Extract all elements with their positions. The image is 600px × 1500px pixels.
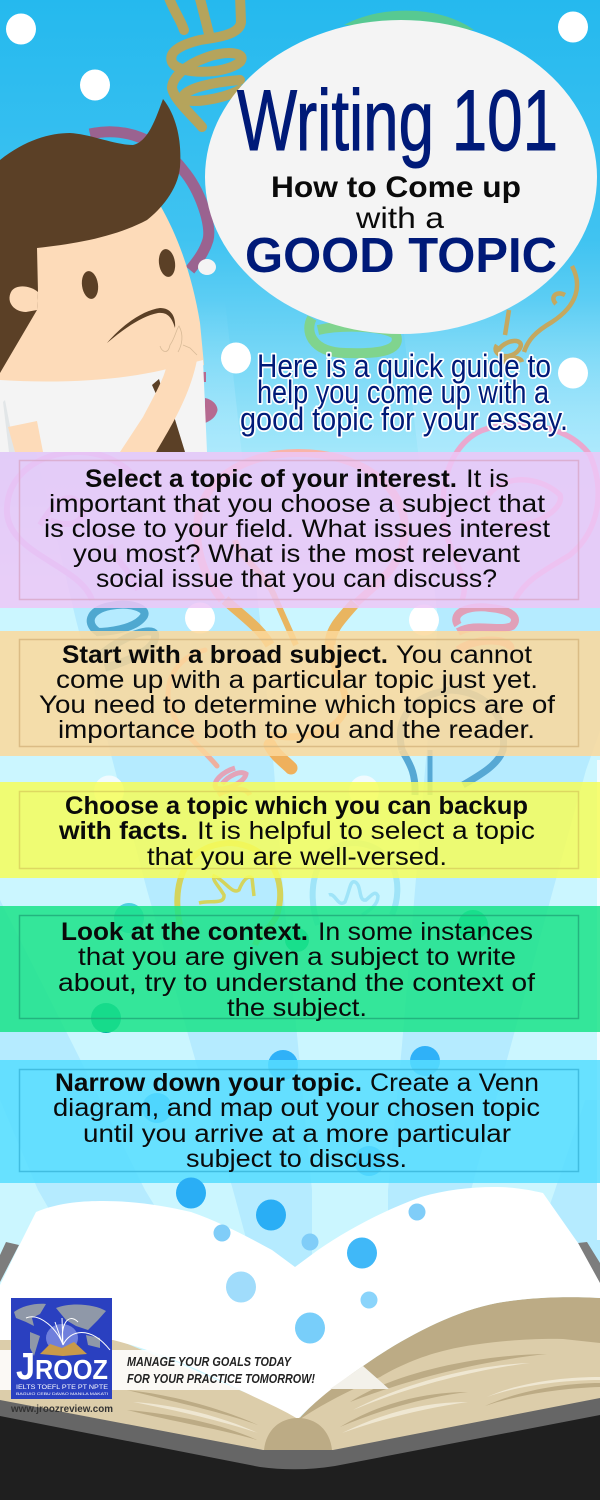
panel: look at the context: In some instances	[318, 918, 533, 946]
doodle: green spring	[309, 318, 397, 353]
left page block	[0, 1338, 300, 1455]
logo: JROOZ	[11, 1298, 112, 1399]
panel: narrow down your topic: Narrow down your topic.	[55, 1069, 362, 1097]
cover corners	[0, 1242, 600, 1285]
doodle: blue spring	[91, 605, 155, 668]
panel: choose a topic with facts: that you are well-versed.	[147, 843, 447, 871]
light rays	[0, 300, 600, 1290]
doodle: purple bulb	[7, 452, 138, 600]
doodle: yellow bulb	[177, 843, 280, 945]
tagline: MANAGE YOUR GOALS TODAY	[127, 1354, 292, 1369]
website url: www.jroozreview.com	[10, 1403, 113, 1415]
tagline	[127, 1354, 316, 1386]
subtitle: How to Come up: How to Come up	[271, 171, 521, 204]
sleeve shadow	[3, 400, 15, 452]
intro text: help you come up with a	[257, 374, 549, 410]
panel: start with a broad subject: importance both to you and the reader.	[58, 716, 535, 744]
panel: look at the context: about, try to understand the context of	[58, 969, 535, 997]
translucent band right	[330, 1366, 389, 1389]
panel: choose a topic with facts: with facts.	[58, 817, 188, 845]
panel: select a topic: you most? What is the most relevant	[73, 540, 520, 568]
intro text	[240, 348, 568, 437]
panel: narrow down your topic: until you arrive at a more particular	[83, 1120, 511, 1148]
doodle: pink spring	[456, 607, 515, 650]
panel: select a topic: social issue that you can discuss?	[96, 565, 497, 593]
doodle: central bulb	[197, 453, 405, 768]
doodle: pink bulb right	[443, 425, 598, 600]
panel: select a topic: Select a topic of your interest.	[85, 465, 457, 493]
panel: start with a broad subject: You need to determine which topics are of	[39, 691, 555, 719]
open book	[0, 1187, 600, 1500]
logo: wordmark: JROOZ	[16, 1346, 108, 1388]
page streaks	[127, 1354, 600, 1440]
eye left	[80, 270, 100, 300]
face	[0, 200, 204, 400]
raised arm	[120, 325, 198, 452]
logo: cities: BAGUIO CEBU DAVAO MANILA MAKATI	[16, 1391, 108, 1396]
shirt	[0, 360, 207, 452]
panel: narrow down your topic: diagram, and map out your chosen topic	[53, 1094, 540, 1122]
doodle: small pink spring	[215, 768, 250, 795]
white pages	[0, 1187, 600, 1419]
panel: narrow down your topic	[0, 1060, 600, 1183]
hair back	[152, 379, 185, 452]
panel: look at the context: Look at the context.	[61, 918, 308, 946]
panel: look at the context: the subject.	[227, 994, 367, 1022]
doodle: gold spring top	[168, 0, 242, 127]
doodle: light blue bulb	[313, 843, 397, 925]
subtitle: GOOD TOPIC: GOOD TOPIC	[245, 229, 557, 283]
panel: select a topic: It is	[466, 465, 509, 493]
intro text: Here is a quick guide to	[257, 348, 551, 384]
logo: book	[40, 1342, 87, 1356]
subtitle: with a: with a	[355, 202, 444, 235]
doodle: blue bulb	[400, 690, 504, 795]
panel: narrow down your topic: subject to discuss.	[186, 1145, 407, 1173]
right page block dark	[296, 1297, 600, 1452]
logo: fountain	[26, 1317, 110, 1350]
small dot by head	[198, 259, 216, 275]
right page block light	[296, 1339, 600, 1452]
doodle: green arc	[344, 11, 474, 30]
black base	[0, 1414, 600, 1500]
panel: choose a topic with facts: Choose a topic which you can backup	[65, 792, 528, 820]
panel: look at the context: that you are given a subject to write	[78, 943, 516, 971]
tagline: FOR YOUR PRACTICE TOMORROW!	[127, 1371, 316, 1386]
finger	[160, 326, 197, 355]
panel: narrow down your topic: Create a Venn	[370, 1069, 539, 1097]
translucent band left	[0, 1350, 240, 1390]
panel: start with a broad subject	[0, 631, 600, 756]
spine dome	[264, 1418, 332, 1450]
panel: start with a broad subject: come up with a particular topic just yet.	[56, 666, 538, 694]
ear	[9, 286, 38, 312]
doodle: gold bulb	[496, 266, 577, 365]
doodle: pink blob	[202, 372, 218, 423]
doodle: purple ring	[90, 132, 209, 270]
panel: select a topic: important that you choose a subject that	[49, 490, 545, 518]
logo: world map	[14, 1304, 106, 1356]
right edge strip	[597, 760, 600, 1240]
mouth	[107, 308, 175, 343]
eye right	[157, 248, 177, 278]
title bubble	[205, 20, 597, 334]
panel: choose a topic with facts	[0, 782, 600, 878]
doodle: small peach bulb	[168, 650, 217, 766]
panel: look at the context	[0, 906, 600, 1032]
panel: choose a topic with facts: It is helpful to select a topic	[197, 817, 535, 845]
logo: glow	[46, 1324, 78, 1352]
left arm	[8, 421, 43, 452]
blue bubbles over book	[176, 1178, 426, 1344]
panel: select a topic	[0, 452, 600, 608]
panel: start with a broad subject: You cannot	[396, 641, 532, 669]
grey cover edge	[0, 1398, 600, 1469]
panel: select a topic: is close to your field. What issues interest	[44, 515, 550, 543]
hair	[0, 99, 180, 373]
character: thinking boy	[0, 99, 207, 452]
panel: start with a broad subject: Start with a broad subject.	[62, 641, 388, 669]
intro text: good topic for your essay.	[240, 401, 568, 437]
blue dots behind panels	[91, 903, 488, 1176]
logo: courses: IELTS TOEFL PTE PT NPTE	[16, 1384, 109, 1391]
white dots	[6, 12, 588, 806]
